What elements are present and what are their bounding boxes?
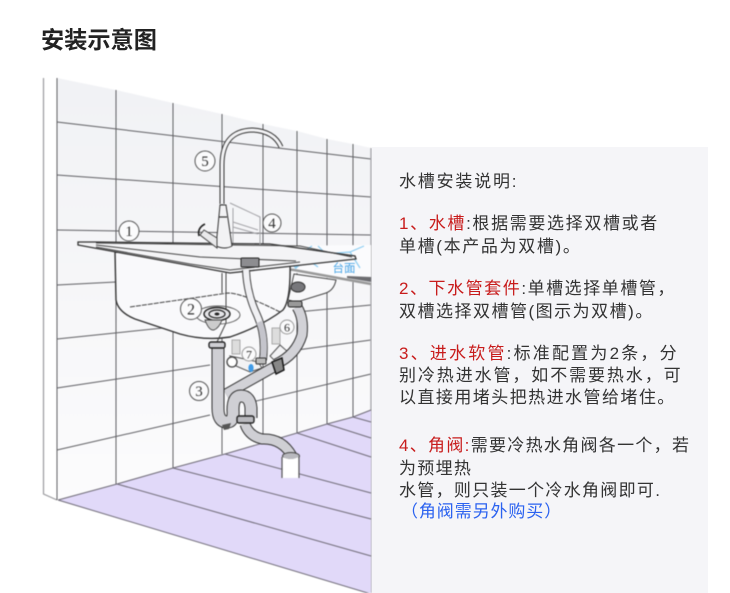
note 1 line 2: 单槽(本产品为双槽)。 — [399, 237, 581, 256]
callout 6: 6 — [284, 320, 290, 334]
callout 4: 4 — [268, 216, 276, 232]
note 2 line 1: 2、下水管套件:单槽选择单槽管， — [399, 279, 676, 298]
callout 7 — [242, 347, 256, 362]
inlet hose — [241, 258, 264, 360]
window reflection — [230, 203, 260, 245]
callout 1 — [119, 221, 139, 241]
angle valves — [227, 328, 288, 372]
note 4 line 1: 4、角阀:需要冷热水角阀各一个，若 — [399, 436, 690, 455]
floor — [58, 410, 371, 593]
sink drain — [196, 306, 240, 330]
callout 2 — [180, 298, 202, 320]
callout 5 — [195, 151, 215, 171]
note 2 line 2: 双槽选择双槽管(图示为双槽)。 — [399, 302, 654, 321]
note 4 blue remark: （角阀需另外购买） — [401, 502, 562, 521]
note 3 line 3: 以直接用堵头把热进水管给堵住。 — [399, 388, 676, 407]
note 4 line 2: 为预埋热 — [399, 459, 472, 478]
note 4 line 3: 水管，则只装一个冷水角阀即可. — [399, 481, 661, 500]
illustration: sink installation diagram — [42, 78, 372, 593]
drain pipes — [218, 307, 302, 456]
callout 5: 5 — [201, 154, 209, 170]
callout 1: 1 — [125, 224, 133, 240]
countertop — [262, 245, 371, 285]
title: 安装示意图 — [41, 27, 157, 53]
callout 3: 3 — [195, 384, 203, 400]
sink bowl — [115, 252, 290, 342]
sink rim — [78, 242, 356, 273]
faucet — [199, 130, 281, 248]
callout 2: 2 — [187, 302, 195, 318]
countertop label: 台面 — [332, 261, 356, 275]
wall with tiles — [44, 78, 371, 593]
callout 6 — [280, 320, 294, 334]
callout 3 — [190, 382, 208, 400]
second bowl — [288, 274, 336, 302]
note 1 line 1: 1、水槽:根据需要选择双槽或者 — [399, 214, 659, 233]
callout 4 — [263, 214, 281, 232]
callout 7: 7 — [246, 348, 252, 362]
notes heading: 水槽安装说明: — [399, 172, 518, 191]
pipe collars — [209, 301, 302, 430]
numbered callouts — [119, 151, 294, 400]
standpipe — [282, 452, 300, 478]
note 3 line 2: 别冷热进水管，如不需要热水，可 — [399, 366, 682, 385]
panel: installation notes — [372, 147, 708, 593]
note 3 line 1: 3、进水软管:标准配置为2条，分 — [399, 344, 679, 363]
